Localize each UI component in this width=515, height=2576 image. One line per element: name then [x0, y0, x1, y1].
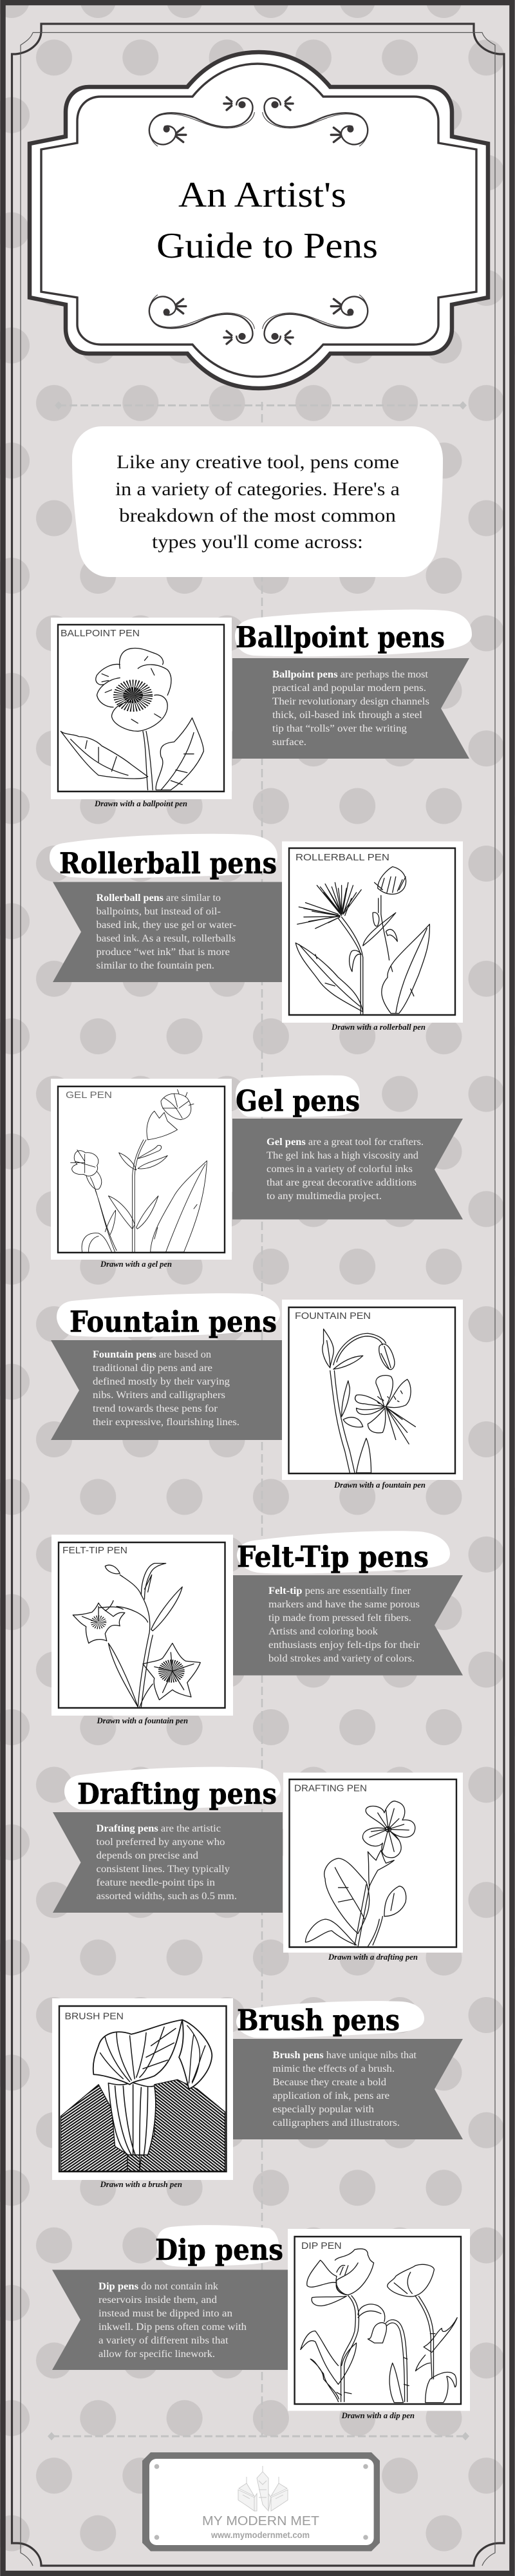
description: instead must be dipped into an — [98, 2308, 232, 2319]
section: felt-tip pens — [52, 1531, 463, 1725]
heading: Gel pens — [236, 1084, 360, 1118]
logo wordmark: MY MODERN MET — [202, 2514, 319, 2528]
description: especially popular with — [273, 2104, 374, 2115]
photo: primrose drawing — [283, 1772, 463, 1953]
plaque rivets — [154, 2464, 368, 2540]
heading: Brush pens — [237, 2003, 400, 2038]
caption: Drawn with a gel pen — [100, 1260, 172, 1269]
description: feature needle-point tips in — [97, 1877, 215, 1888]
description: that are great decorative additions — [267, 1177, 417, 1188]
description: Ballpoint pens are perhaps the most — [272, 669, 429, 680]
description: tip made from pressed felt fibers. — [268, 1613, 411, 1624]
plaque frame — [142, 2452, 380, 2552]
description — [97, 1823, 237, 1902]
heading blob — [50, 834, 277, 878]
title text — [156, 175, 378, 266]
photo: jack-in-the-pulpit drawing — [52, 1998, 233, 2180]
ribbon — [232, 658, 469, 759]
heading blob — [237, 1531, 450, 1574]
photo: campion drawing — [51, 1079, 232, 1260]
dashed divider lines — [48, 401, 469, 2441]
description: depends on precise and — [97, 1850, 198, 1861]
section: drafting pens — [53, 1767, 463, 1962]
description: Fountain pens are based on — [93, 1349, 211, 1360]
description: Rollerball pens are similar to — [97, 893, 221, 904]
description: allow for specific linework. — [98, 2349, 215, 2360]
description: surface. — [272, 737, 306, 748]
title text: An Artist's — [178, 175, 346, 215]
description: application of ink, pens are — [273, 2090, 389, 2101]
description: Felt-tip pens are essentially finer — [268, 1586, 411, 1596]
heading blob — [157, 2225, 279, 2267]
description: Drafting pens are the artistic — [97, 1823, 221, 1834]
description: Because they create a bold — [273, 2077, 386, 2088]
description: produce “wet ink” that is more — [97, 947, 230, 958]
logo url: www.mymodernmet.com — [211, 2530, 310, 2540]
intro panel — [72, 426, 443, 577]
description: Their revolutionary design channels — [272, 696, 429, 707]
photo: primrose drawing: DRAFTING PEN — [294, 1784, 367, 1794]
plaque inner — [149, 2459, 374, 2545]
description — [267, 1137, 424, 1202]
ribbon — [51, 1340, 282, 1440]
description: thick, oil-based ink through a steel — [272, 710, 422, 721]
plaque inner line — [41, 64, 476, 377]
intro text: in a variety of categories. Here's a — [115, 478, 400, 500]
description: to any multimedia project. — [267, 1191, 382, 1202]
photo: bellflower drawing — [52, 1535, 233, 1716]
heading blob — [64, 1767, 281, 1810]
photo: thistle drawing: ROLLERBALL PEN — [295, 853, 389, 863]
heading: Fountain pens — [70, 1305, 277, 1339]
description — [98, 2281, 247, 2360]
ribbon — [52, 2269, 288, 2370]
intro text — [115, 451, 400, 553]
description: a variety of different nibs that — [98, 2335, 229, 2346]
heading blob — [57, 1293, 280, 1337]
description: trend towards these pens for — [93, 1403, 218, 1414]
ribbon — [232, 1119, 463, 1220]
description — [272, 669, 429, 748]
intro text: breakdown of the most common — [119, 505, 396, 526]
description — [268, 1586, 420, 1664]
heading: Rollerball pens — [59, 846, 277, 880]
description — [97, 893, 236, 971]
section: brush pens — [52, 1998, 463, 2189]
description: mimic the effects of a brush. — [273, 2063, 395, 2074]
description: nibs. Writers and calligraphers — [93, 1390, 225, 1401]
logo: buildings — [238, 2466, 288, 2511]
description: assorted widths, such as 0.5 mm. — [97, 1891, 237, 1902]
intro background — [72, 426, 443, 577]
caption: Drawn with a fountain pen — [96, 1716, 188, 1725]
section: rollerball pens — [50, 834, 463, 1032]
ribbon — [53, 882, 282, 982]
photo: lily drawing: FOUNTAIN PEN — [295, 1311, 371, 1321]
description: Dip pens do not contain ink — [98, 2281, 218, 2292]
description: Gel pens are a great tool for crafters. — [267, 1137, 424, 1148]
photo: poppy drawing — [288, 2229, 470, 2411]
heading blob — [236, 2001, 424, 2038]
description: The gel ink has a high viscosity and — [267, 1150, 418, 1161]
flourishes — [149, 97, 368, 344]
photo: thistle drawing — [282, 841, 463, 1023]
description — [93, 1349, 239, 1428]
title text: Guide to Pens — [156, 226, 378, 266]
description: based ink, they use gel or water- — [97, 920, 236, 931]
ribbon — [53, 1812, 283, 1913]
section: fountain pens — [51, 1293, 463, 1490]
heading: Drafting pens — [77, 1777, 277, 1811]
title plaque — [30, 52, 488, 388]
heading blob — [235, 610, 472, 656]
description: similar to the fountain pen. — [97, 960, 214, 971]
caption: Drawn with a fountain pen — [333, 1481, 426, 1490]
caption: Drawn with a ballpoint pen — [94, 799, 187, 808]
description: inkwell. Dip pens often come with — [98, 2322, 247, 2333]
section: gel pens — [51, 1075, 463, 1269]
description: traditional dip pens and are — [93, 1363, 212, 1374]
photo: pansy drawing — [51, 618, 232, 799]
photo: bellflower drawing: FELT-TIP PEN — [62, 1546, 127, 1556]
description — [273, 2050, 417, 2128]
description: practical and popular modern pens. — [272, 683, 426, 694]
caption: Drawn with a rollerball pen — [331, 1023, 426, 1032]
ribbon — [233, 2039, 463, 2139]
photo: lily drawing — [282, 1300, 463, 1480]
description: ballpoints, but instead of oil- — [97, 906, 221, 917]
description: Brush pens have unique nibs that — [273, 2050, 417, 2061]
description: enthusiasts enjoy felt-tips for their — [268, 1640, 420, 1651]
intro text: types you'll come across: — [152, 531, 363, 553]
plaque outer shape — [30, 52, 488, 388]
description: defined mostly by their varying — [93, 1376, 230, 1387]
photo: pansy drawing: BALLPOINT PEN — [61, 629, 140, 639]
description: tool preferred by anyone who — [97, 1837, 225, 1848]
section: ballpoint pens — [51, 610, 472, 808]
photo: campion drawing: GEL PEN — [66, 1090, 112, 1101]
caption: Drawn with a drafting pen — [328, 1953, 418, 1962]
heading: Ballpoint pens — [236, 620, 445, 654]
heading: Dip pens — [155, 2233, 283, 2267]
caption: Drawn with a brush pen — [100, 2180, 182, 2189]
description: calligraphers and illustrators. — [273, 2117, 400, 2128]
photo: poppy drawing: DIP PEN — [301, 2241, 342, 2251]
heading blob — [236, 1075, 360, 1117]
footer logo plaque — [142, 2452, 380, 2552]
caption: Drawn with a dip pen — [341, 2411, 415, 2420]
intro text: Like any creative tool, pens come — [117, 451, 399, 473]
ribbon — [233, 1575, 463, 1676]
heading: Felt-Tip pens — [237, 1540, 429, 1574]
photo: jack-in-the-pulpit drawing: BRUSH PEN — [64, 2012, 124, 2022]
section: dip pens — [52, 2225, 470, 2420]
description: comes in a variety of colorful inks — [267, 1164, 413, 1175]
description: tip that “rolls” over the writing — [272, 723, 407, 734]
description: based ink. As a result, rollerballs — [97, 933, 236, 944]
description: consistent lines. They typically — [97, 1864, 230, 1875]
description: reservoirs inside them, and — [98, 2295, 217, 2306]
description: Artists and coloring book — [268, 1626, 378, 1637]
description: their expressive, flourishing lines. — [93, 1417, 239, 1428]
description: markers and have the same porous — [268, 1599, 420, 1610]
description: bold strokes and variety of colors. — [268, 1653, 415, 1664]
